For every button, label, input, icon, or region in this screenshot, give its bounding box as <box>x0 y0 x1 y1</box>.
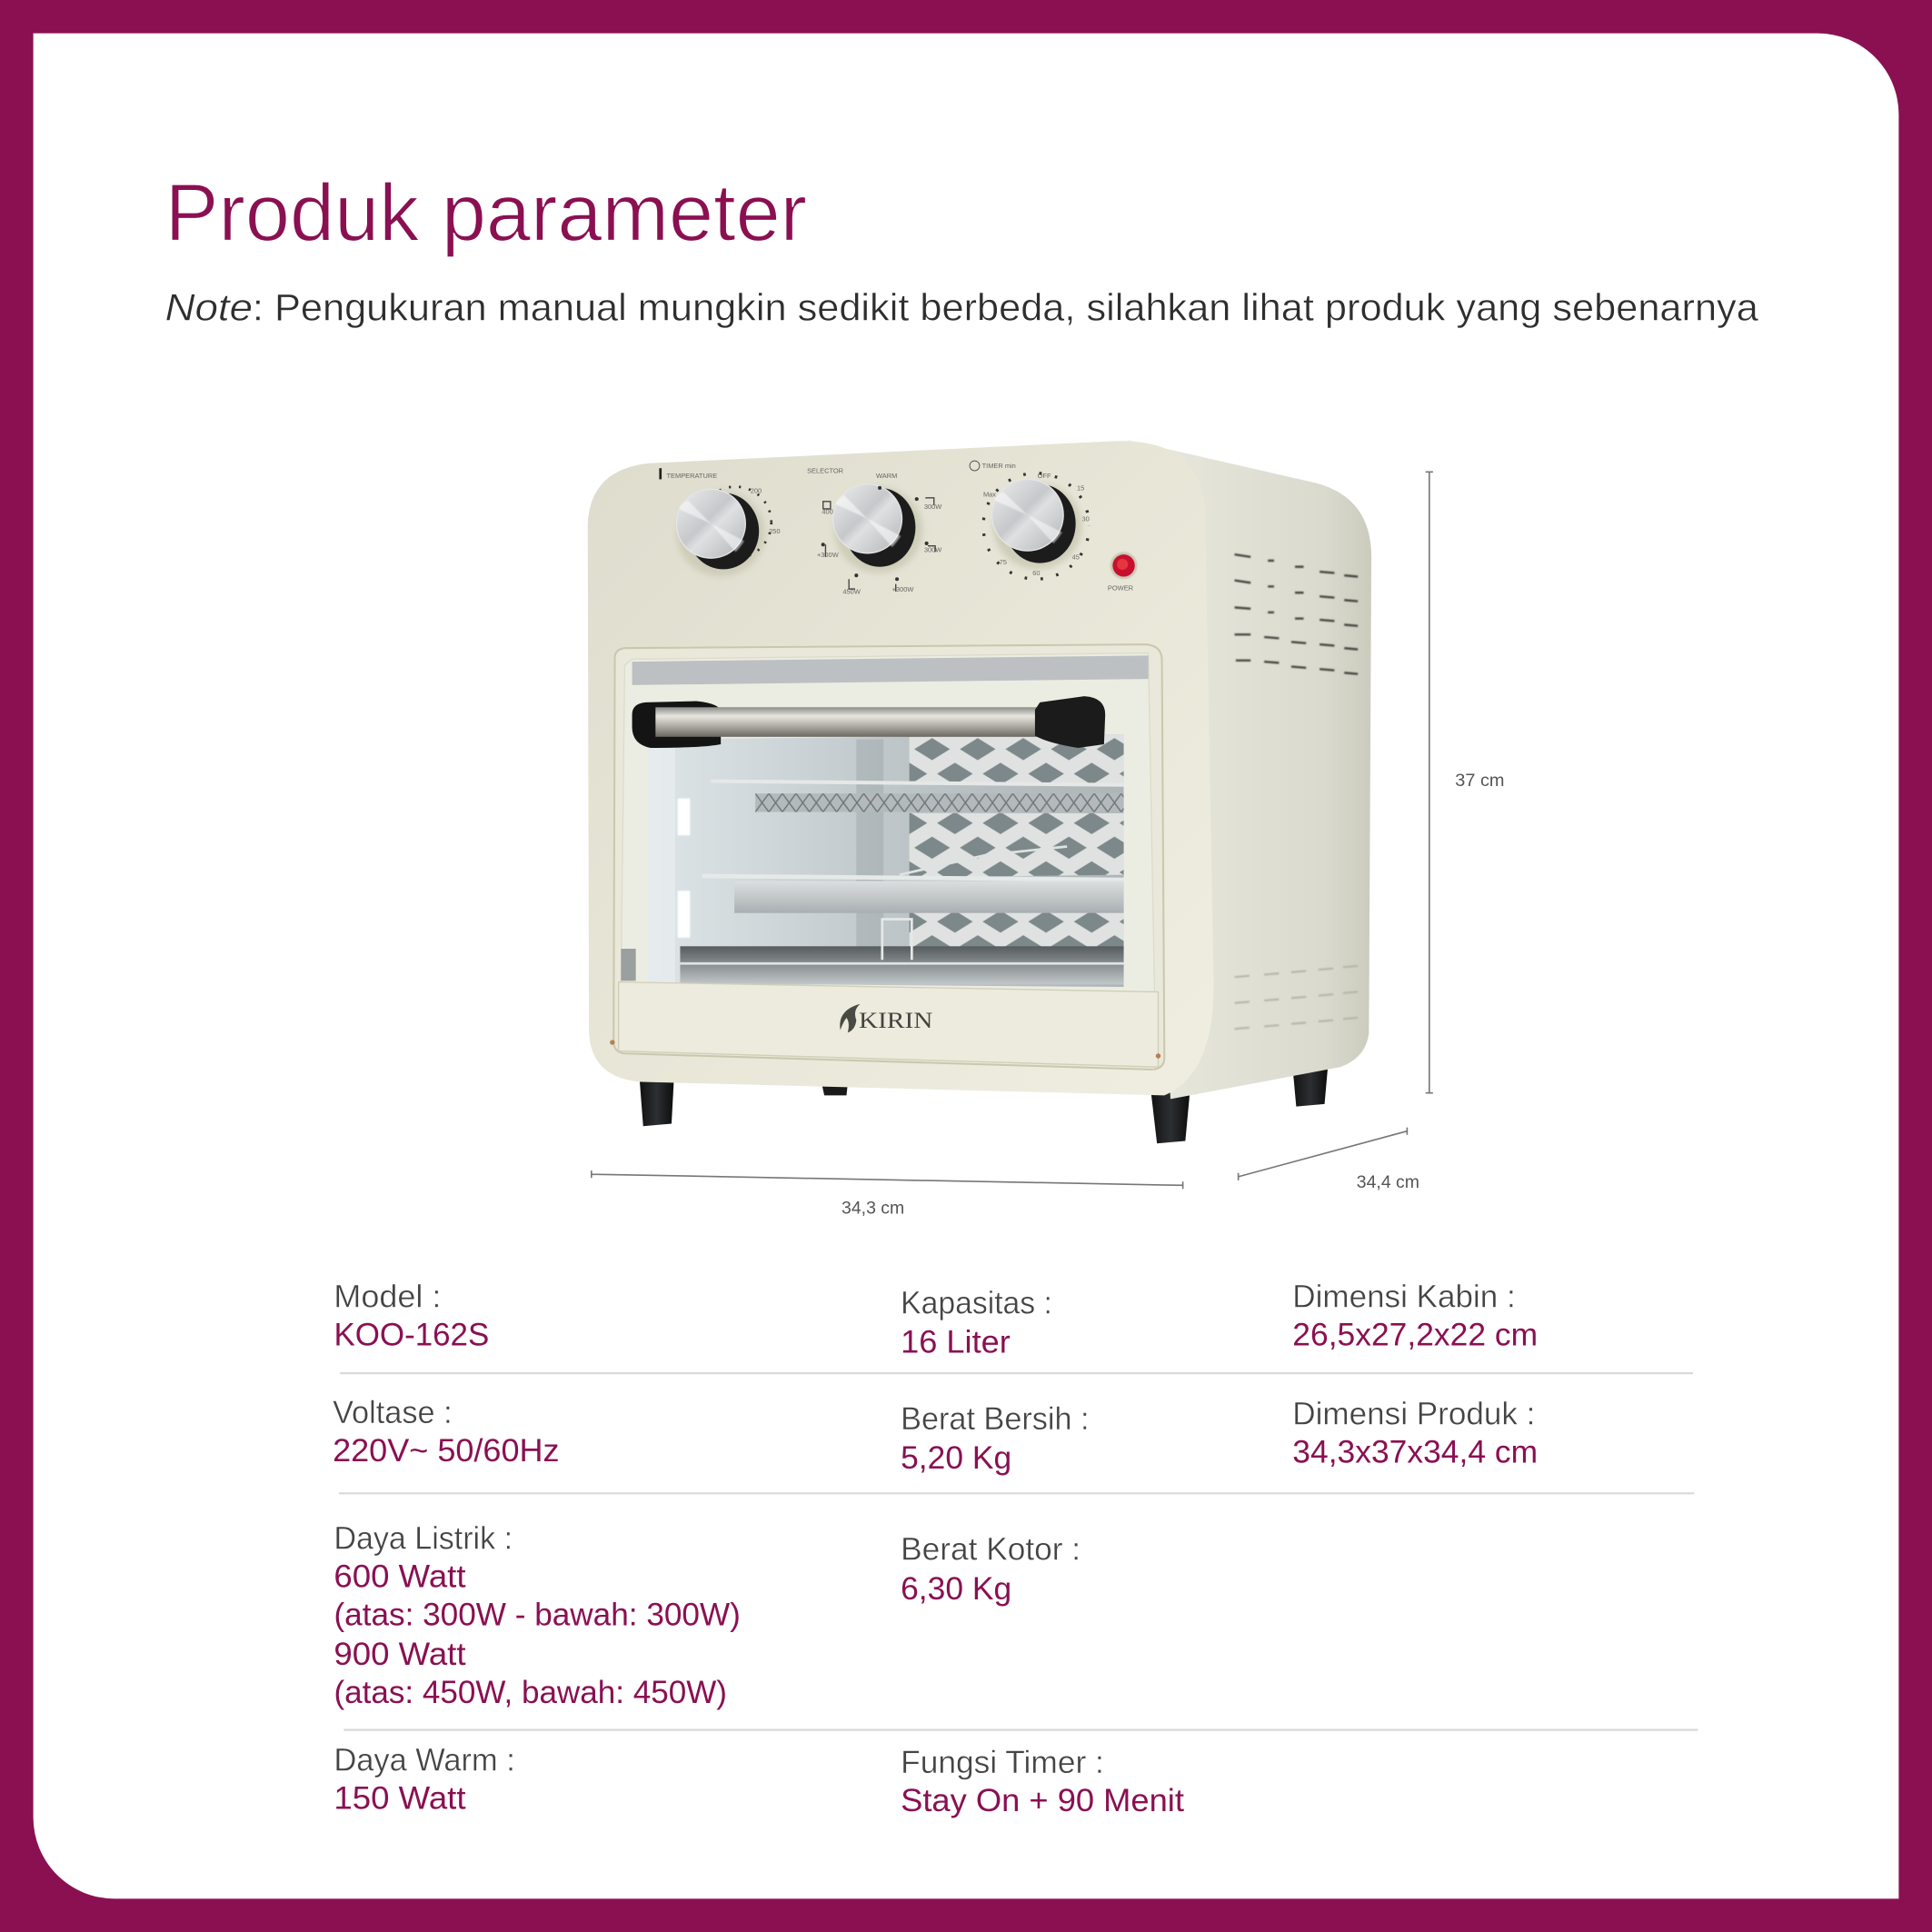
spec: cabin dimensions: 26,5x27,2x22 cm <box>1292 1318 1538 1353</box>
spec: timer function: Fungsi Timer : <box>901 1745 1104 1780</box>
spec: net weight: Berat Bersih : <box>901 1401 1090 1437</box>
spec: voltage: 220V~ 50/60Hz <box>333 1433 560 1469</box>
dimension: depth: 34,4 cm <box>1357 1173 1419 1192</box>
dial labels: POWER <box>1108 583 1134 592</box>
dial labels: 200 <box>751 486 762 494</box>
dial labels: 250 <box>769 527 780 535</box>
timer dial <box>983 473 1090 579</box>
spec: gross weight: Berat Kotor : <box>901 1532 1081 1568</box>
spec: timer function: Stay On + 90 Menit <box>901 1783 1184 1818</box>
dial labels: OFF <box>1038 472 1051 480</box>
spec: capacity <box>901 1285 1052 1360</box>
lower vents <box>1235 966 1358 1029</box>
spec: product dimensions <box>1292 1396 1538 1469</box>
door handle <box>632 696 1105 748</box>
spec: net weight <box>901 1401 1090 1476</box>
dimension: height: 37 cm <box>1455 772 1505 791</box>
dial labels: 400W <box>822 507 840 515</box>
oven illustration <box>588 440 1371 1143</box>
spec: cabin dimensions: Dimensi Kabin : <box>1292 1280 1516 1315</box>
spec: voltage <box>333 1395 560 1469</box>
upper vents <box>1235 554 1358 674</box>
brand logo: KIRIN <box>859 1007 932 1033</box>
spec: power: 900 Watt <box>334 1637 466 1672</box>
spec: capacity: 16 Liter <box>901 1325 1011 1360</box>
spec: power: (atas: 300W - bawah: 300W) <box>334 1597 741 1632</box>
dial labels: 15 <box>1077 484 1084 493</box>
dimension: width: 34,3 cm <box>842 1200 904 1219</box>
dial labels: +300W <box>892 585 913 593</box>
dial labels: Max <box>983 490 996 498</box>
power button <box>1110 552 1137 579</box>
spec: cabin dimensions <box>1292 1280 1538 1353</box>
copper hinges <box>610 1040 1160 1059</box>
title: Produk parameter <box>165 166 807 257</box>
dial labels: 300W <box>924 545 941 553</box>
spec: power <box>334 1520 741 1710</box>
row dividers <box>339 1373 1698 1730</box>
spec: warm power <box>334 1742 515 1816</box>
dial labels: 300W <box>924 503 941 511</box>
spec: power: (atas: 450W, bawah: 450W) <box>334 1675 727 1710</box>
spec: voltage: Voltase : <box>333 1395 453 1430</box>
dial labels: 450W <box>842 588 861 596</box>
oven feet <box>640 1062 1329 1143</box>
dial labels: 45 <box>1072 553 1080 562</box>
dial labels: SELECTOR <box>807 467 844 475</box>
spec: product dimensions: Dimensi Produk : <box>1292 1396 1535 1431</box>
note text: : Pengukuran manual mungkin sedikit berbeda, silahkan lihat produk yang sebenarnya <box>253 286 1758 329</box>
dimension: width <box>592 1170 1183 1219</box>
spec: capacity: Kapasitas : <box>901 1285 1052 1320</box>
dimension: height <box>1426 472 1505 1093</box>
selector dial <box>822 484 935 592</box>
spec: timer function <box>901 1745 1184 1818</box>
dial labels: +300W <box>817 551 839 559</box>
dial labels: 30 <box>1081 515 1090 523</box>
note text: Note <box>165 286 253 329</box>
dial labels: WARM <box>876 472 897 480</box>
dial labels: 60 <box>1032 569 1040 577</box>
spec: power: 600 Watt <box>334 1559 466 1594</box>
dial labels <box>659 461 1134 596</box>
oven front panel <box>588 441 1214 1095</box>
door bottom panel <box>619 982 1159 1067</box>
dimension: depth <box>1239 1128 1419 1192</box>
spec: warm power: Daya Warm : <box>334 1742 515 1778</box>
spec: model: Model : <box>334 1280 441 1315</box>
spec: gross weight: 6,30 Kg <box>901 1571 1011 1607</box>
door glass <box>621 653 1154 991</box>
spec: warm power: 150 Watt <box>334 1780 466 1816</box>
oven side panel <box>1128 440 1371 1099</box>
dial labels: TIMER min <box>982 462 1016 470</box>
door frame <box>613 644 1164 1070</box>
brand logo <box>840 1004 932 1033</box>
spec: model: KOO-162S <box>334 1318 489 1353</box>
spec: net weight: 5,20 Kg <box>901 1440 1011 1476</box>
temperature dial <box>676 487 772 577</box>
spec: model <box>334 1280 489 1353</box>
oven racks <box>680 782 1124 963</box>
spec: power: Daya Listrik : <box>334 1520 513 1556</box>
spec: product dimensions: 34,3x37x34,4 cm <box>1292 1434 1538 1469</box>
dial labels: 75 <box>1000 558 1007 566</box>
spec: gross weight <box>901 1532 1081 1607</box>
dial labels: TEMPERATURE <box>667 472 717 480</box>
